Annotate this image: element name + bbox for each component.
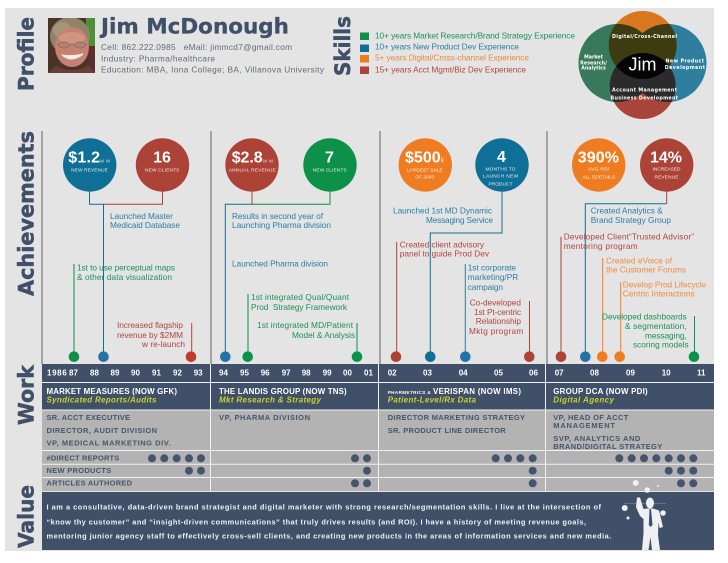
achievements panel: 1994-01: $2.8 — [232, 149, 263, 166]
timeline bar — [42, 364, 714, 382]
timeline bar: 03 — [423, 369, 432, 378]
achievements panel: 1994-01: NEW CLIENTS — [313, 167, 347, 173]
achievements panel: 2002-06: 1st Pt-centric — [474, 307, 521, 317]
venn diagram: Development — [665, 65, 706, 71]
achievements panel: 1994-01: 1st integrated MD/Patient — [257, 320, 354, 330]
timeline bar: 00 — [343, 369, 352, 378]
timeline bar: 94 — [219, 369, 228, 378]
row: new products — [46, 466, 697, 475]
achievements panel: 2002-06: panel to guide Prod Dev — [400, 249, 490, 259]
contact details: Cell: 862.222.0985 eMail: jimmcd7@gmail.com — [101, 42, 292, 52]
achievements panel: 2007-11: Created Analytics & — [591, 206, 663, 216]
row: articles authored: ARTICLES AUTHORED — [46, 478, 133, 488]
skills legend — [360, 30, 575, 75]
achievements panel: 1994-01: Prod Strategy Framework — [251, 302, 348, 312]
timeline bar: 95 — [240, 369, 249, 378]
venn diagram — [578, 11, 706, 119]
value statement panel: “know thy customer” and “insight-driven communications” that truly drives results (and ROI). I have a history of meeting revenue goals, — [46, 517, 586, 526]
row: articles authored — [46, 478, 697, 488]
photo of Jim — [48, 17, 95, 73]
contact details: Industry: Pharma/healthcare — [101, 53, 215, 63]
value statement panel — [42, 492, 714, 550]
job titles block: VP, HEAD OF ACCT — [553, 413, 629, 422]
timeline bar: 06 — [529, 369, 538, 378]
achievements panel: 1994-01 — [220, 138, 362, 362]
achievements panel: 2002-06: Created client advisory — [400, 240, 485, 250]
timeline bar: 96 — [261, 369, 270, 378]
timeline bar: 04 — [459, 369, 468, 378]
skills legend: 10+ years Market Research/Brand Strategy Experience — [375, 30, 575, 40]
company header band: GROUP DCA (NOW PDI) — [553, 387, 648, 396]
achievements panel: 1986-93: $1.2 — [68, 149, 100, 166]
achievements panel: 1994-01: 1st integrated Qual/Quant — [251, 292, 350, 302]
achievements panel: 2007-11: mentoring program — [564, 241, 638, 251]
timeline bar: 09 — [626, 369, 635, 378]
achievements panel: 2002-06: Launched 1st MD Dynamic — [393, 206, 492, 216]
achievements panel: 1986-93: & other data visualization — [77, 272, 172, 282]
achievements panel: 2007-11 — [556, 138, 706, 362]
achievements panel: 1986-93: 16 — [153, 149, 171, 166]
achievements panel: 1994-01: Launching Pharma division — [232, 220, 331, 230]
achievements panel: 2007-11: scoring models — [633, 340, 689, 350]
timeline bar: 07 — [555, 369, 564, 378]
job titles block — [42, 410, 714, 491]
job titles block: VP, MEDICAL MARKETING DIV. — [46, 438, 171, 447]
name: Jim McDonough — [99, 14, 289, 38]
job titles block: SR. ACCT EXECUTIVE — [46, 413, 130, 422]
row: direct reports — [46, 454, 697, 462]
venn diagram: Jim — [628, 54, 656, 74]
achievements panel: 2002-06: 4 — [497, 149, 506, 166]
achievements panel: 1986-93: NEW REVENUE — [71, 167, 108, 173]
achievements panel: 2007-11: Developed Client“Trusted Advisor” — [564, 231, 694, 241]
company header band: Patient-Level/Rx Data — [388, 396, 477, 405]
achievements panel: 1986-93: Medicaid Database — [110, 220, 180, 230]
achievements panel: 2002-06: PRODUCT — [488, 181, 513, 187]
contact details: Education: MBA, Iona College; BA, Villanova University — [101, 65, 325, 75]
job titles block: SVP, ANALYTICS AND — [553, 434, 641, 443]
achievements panel: 2002-06: Messaging Service — [426, 215, 493, 225]
venn diagram: Analytics — [581, 66, 606, 72]
venn diagram: New Product — [666, 58, 705, 64]
achievements panel: 1986-93: Launched Master — [110, 211, 173, 221]
row: direct reports: #DIRECT REPORTS — [46, 454, 119, 462]
achievements panel: 1986-93: NEW CLIENTS — [145, 167, 179, 173]
timeline bar: 10 — [662, 369, 671, 378]
heading: Achievements: Achievements — [14, 131, 38, 296]
company header band: MARKET MEASURES (NOW GFK) — [46, 387, 177, 396]
job titles block: DIRECTOR MARKETING STRATEGY — [388, 413, 525, 422]
achievements panel: 2007-11: Brand Strategy Group — [591, 215, 671, 225]
heading: Skills: Skills — [331, 16, 355, 76]
venn diagram: Account Management — [612, 88, 678, 94]
timeline bar: 08 — [590, 369, 599, 378]
panel dividers — [41, 131, 548, 364]
achievements panel: 1986-93 — [63, 138, 196, 362]
achievements panel: 2007-11: REVENUE — [654, 174, 678, 180]
achievements panel: 1986-93: revenue by $2MM — [117, 330, 183, 340]
achievements panel: 1994-01: Model & Analysis — [292, 330, 355, 340]
company header band: Mkt Research & Strategy — [219, 396, 322, 405]
timeline bar: 89 — [110, 369, 120, 378]
skills legend: 5+ years Digital/Cross-channel Experience — [375, 52, 529, 62]
company header band: Syndicated Reports/Audits — [46, 396, 157, 405]
timeline bar: 93 — [194, 369, 203, 378]
achievements panel: 2002-06: Mktg program — [469, 326, 523, 336]
achievements panel: 1986-93: w re-launch — [141, 339, 185, 349]
achievements panel: 2002-06: campaign — [468, 282, 503, 292]
icon: businessman with bubbles — [622, 480, 666, 550]
achievements panel: 1994-01: Results in second year of — [232, 211, 324, 221]
achievements panel: 2007-11: the Customer Forums — [606, 265, 686, 275]
job titles block: DIRECTOR, AUDIT DIVISION — [46, 426, 157, 435]
timeline bar: 90 — [131, 369, 140, 378]
achievements panel: 2007-11: ALL EDETAILS — [582, 174, 615, 180]
achievements panel: 2007-11: & segmentation, — [625, 321, 687, 331]
achievements panel: 2002-06: LAUNCH NEW — [483, 174, 518, 180]
achievements panel: 1994-01: ANNUAL REVENUE — [229, 167, 276, 173]
venn diagram: Market — [584, 55, 604, 61]
achievements panel: 2002-06 — [391, 138, 535, 362]
venn diagram: Research/ — [580, 60, 607, 66]
achievements panel: 1994-01: MM — [263, 158, 273, 164]
value statement panel: I am a consultative, data-driven brand strategist and digital marketer with strong research/segmentation skills. I live at the intersection of — [46, 502, 602, 511]
heading: Profile: Profile — [14, 17, 38, 91]
timeline bar: 01 — [364, 369, 373, 378]
heading: Work: Work — [14, 364, 38, 425]
job titles block: VP, PHARMA DIVISION — [219, 413, 310, 422]
timeline bar: 87 — [69, 369, 78, 378]
achievements panel: 2007-11: INCREASED — [652, 166, 681, 172]
achievements panel: 2002-06: k — [441, 157, 445, 164]
achievements panel: 1986-93: 1st to use perceptual maps — [77, 263, 175, 273]
timeline bar: 99 — [323, 369, 332, 378]
achievements panel: 1986-93: Increased flagship — [117, 320, 183, 330]
contact details — [101, 42, 325, 75]
skills legend: 10+ years New Product Dev Experience — [375, 42, 519, 52]
achievements panel: 2002-06: MONTHS TO — [486, 166, 516, 172]
venn diagram: Business Development — [610, 96, 679, 102]
timeline bar: 02 — [388, 369, 397, 378]
heading: Value: Value — [14, 485, 38, 548]
timeline bar: 97 — [282, 369, 291, 378]
grid separators — [42, 364, 714, 491]
company header band: THE LANDIS GROUP (NOW TNS) — [219, 387, 347, 396]
achievements panel: 2007-11: 390% — [578, 149, 619, 166]
achievements panel: 2002-06: LARGEST SALE — [407, 167, 443, 173]
achievements panel: 2007-11: AVG ROI — [588, 166, 609, 172]
achievements panel: 2007-11: Develop Prod Lifecycle — [623, 280, 706, 290]
achievements panel: 2002-06: 1st corporate — [468, 263, 516, 273]
timeline bar: 98 — [302, 369, 311, 378]
value statement panel: mentoring junior agency staff to effectively cross-sell clients, and creating new products in the areas of information services and new media. — [46, 532, 611, 541]
company header band: VERISPAN (NOW IMS) — [433, 387, 521, 396]
company header band: PHARMETRICS & — [388, 390, 431, 395]
row: new products: NEW PRODUCTS — [46, 466, 111, 475]
achievements panel: 1994-01: 7 — [325, 149, 334, 166]
achievements panel: 2007-11: Centric Interactions — [623, 289, 695, 299]
achievements panel: 2007-11: Developed dashboards — [602, 312, 687, 322]
skills legend: 15+ years Acct Mgmt/Biz Dev Experience — [375, 65, 526, 75]
job titles block: SR. PRODUCT LINE DIRECTOR — [388, 426, 506, 435]
company header band: Digital Agency — [553, 396, 615, 405]
timeline bar: 05 — [494, 369, 503, 378]
achievements panel: 1986-93: MM — [100, 158, 110, 164]
company header band — [42, 383, 714, 410]
venn diagram: Digital/Cross-Channel — [612, 34, 677, 40]
achievements panel: 2007-11: Created eVoice of — [606, 255, 673, 265]
achievements panel: 1994-01: Launched Pharma division — [232, 259, 328, 269]
achievements panel: 2007-11: 14% — [650, 149, 682, 166]
achievements panel: 2002-06: OF 2003 — [415, 174, 434, 180]
achievements panel: 2002-06: Co-developed — [470, 298, 521, 308]
achievements panel: 2002-06: $500 — [405, 149, 441, 166]
timeline bar: 92 — [173, 369, 182, 378]
job titles block: BRAND/DIGITAL STRATEGY — [553, 442, 662, 451]
achievements panel: 2007-11: messaging, — [645, 331, 687, 341]
timeline bar: 88 — [90, 369, 99, 378]
achievements panel: 2002-06: marketing/PR — [468, 272, 518, 282]
timeline bar: 11 — [697, 369, 706, 378]
achievements panel: 2002-06: Relationship — [476, 316, 521, 326]
job titles block: MANAGEMENT — [553, 421, 615, 430]
timeline bar: 91 — [152, 369, 161, 378]
timeline bar: 1986 — [47, 369, 67, 378]
